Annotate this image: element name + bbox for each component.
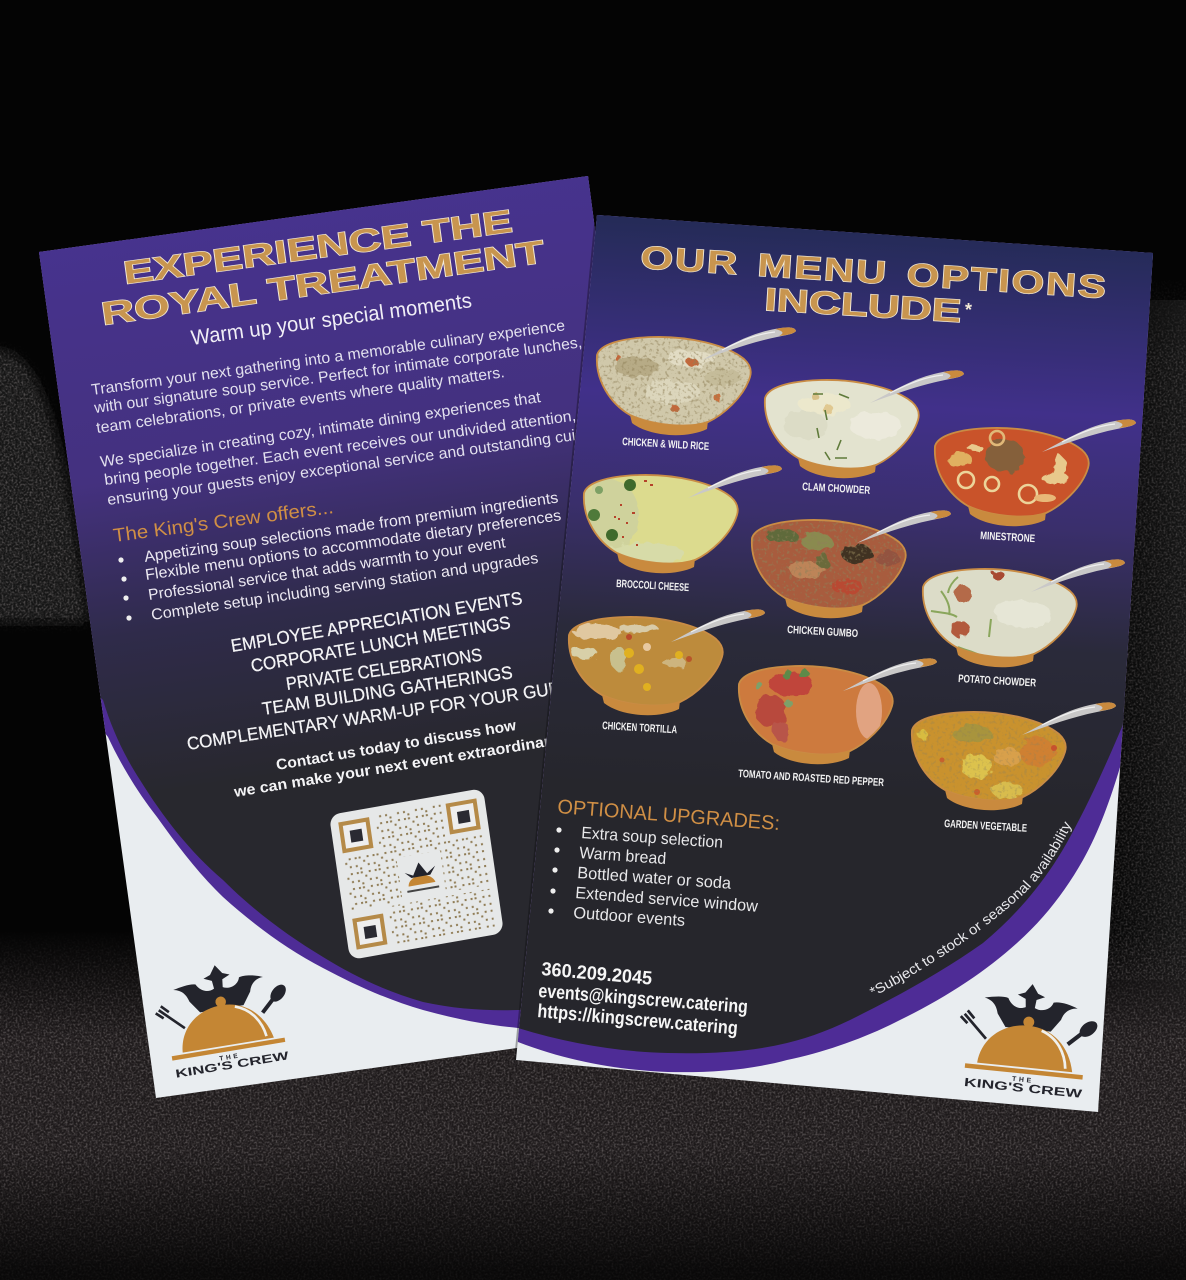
heading: optional upgrades: OPTIONAL UPGRADES: [557,796,781,835]
logo: left flyer: KING'S CREW [175,1050,290,1081]
bullet list: offers: Appetizing soup selections made from premium ingredients [143,489,560,566]
soup bowl: potato chowder [918,559,1125,669]
text block: event types: CORPORATE LUNCH MEETINGS [249,612,512,676]
text block: intro paragraphs: ensuring your guests enjoy exceptional service and outstanding cuisine. [106,423,610,509]
text block: contact details: events@kingscrew.catering [538,981,749,1018]
soup bowl: broccoli cheese [579,465,782,575]
text block: intro paragraphs: Transform your next gathering into a memorable culinary experience [90,317,566,399]
bullet list: upgrades: Warm bread [579,844,667,868]
text block: intro paragraphs: team celebrations, or private events where quality matters. [95,364,506,437]
text block: contact details: 360.209.2045 [541,959,653,990]
soup bowl: chicken gumbo [747,510,951,620]
bullet list: upgrades: Outdoor events [573,904,686,930]
text block: contact details [537,959,749,1039]
bullet list: offers [118,489,563,624]
label: chicken and wild rice: CHICKEN & WILD RICE [622,436,709,453]
label: garden vegetable: GARDEN VEGETABLE [944,818,1027,835]
heading: left title: EXPERIENCE THE [121,203,514,291]
text block: event types: PRIVATE CELEBRATIONS [285,645,483,694]
logo: right flyer: KING'S CREW [963,1075,1084,1101]
heading: left title: ROYAL TREATMENT [99,233,547,332]
label: potato chowder: POTATO CHOWDER [958,673,1036,689]
soup bowl: chicken tortilla [564,609,765,717]
label: minestrone: MINESTRONE [980,530,1035,545]
text block: intro paragraphs: with our signature soup service. Perfect for intimate corporate lunches, [92,334,583,417]
call to action: Contact us today to discuss how [275,717,518,774]
bullet list: upgrades: Extended service window [575,884,759,916]
heading: right title: * [965,300,972,320]
text block: event types: EMPLOYEE APPRECIATION EVENTS [229,588,524,656]
logo: left flyer: THE [219,1052,241,1063]
logo: right flyer [954,977,1104,1102]
label: chicken tortilla: CHICKEN TORTILLA [602,720,677,736]
footnote on curve: *Subject to stock or seasonal availability [870,821,1072,993]
label: tomato and roasted red pepper: TOMATO AND ROASTED RED PEPPER [738,768,884,789]
panel: left flyer, Experience the Royal Treatment [39,176,596,1098]
label: broccoli cheese: BROCCOLI CHEESE [616,578,689,594]
logo: right flyer: THE [1012,1076,1034,1085]
heading: right title: INCLUDE [764,281,962,329]
bullet list: upgrades: Extra soup selection [581,824,724,852]
soup bowl: chicken and wild rice [592,327,796,437]
soup bowl: minestrone [930,419,1136,528]
heading: The King's Crew offers: The King's Crew offers... [112,497,335,547]
label: clam chowder: CLAM CHOWDER [802,481,870,497]
soup bowl: clam chowder [760,370,964,480]
bullet list: offers: Professional service that adds warmth to your event [147,534,507,604]
panel: right flyer, Our Menu Options [514,215,1153,1112]
text block: event types [186,588,594,754]
heading: left title [99,203,547,332]
label: chicken gumbo: CHICKEN GUMBO [787,624,859,640]
text block: intro paragraphs: bring people together. Each event receives our undivided attention, [103,408,577,489]
soup bowl: garden vegetable [907,702,1116,812]
QR code card [329,788,504,960]
bullet list: upgrades: Bottled water or soda [577,864,732,893]
heading: right title [640,239,1109,329]
text block: event types: COMPLEMENTARY WARM-UP FOR YOUR GUESTS [186,673,594,754]
bullet list: offers: Complete setup including serving station and upgrades [150,550,540,624]
text block: intro paragraphs: We specialize in creating cozy, intimate dining experiences that [99,389,543,471]
background: dark fabric [0,288,1186,1280]
text block: event types: TEAM BUILDING GATHERINGS [261,662,514,719]
subtitle: Warm up your special moments [190,289,473,350]
soup bowl: tomato and roasted red pepper [734,658,937,766]
text block: intro paragraphs [90,317,610,509]
bullet list: offers: Flexible menu options to accommodate dietary preferences [144,507,563,584]
call to action: we can make your next event extraordinary. [232,731,563,801]
text block: contact details: https://kingscrew.catering [537,1001,739,1039]
heading: right title: OUR MENU OPTIONS [640,239,1109,305]
logo: left flyer [150,954,301,1082]
bullet list: upgrades [548,824,759,930]
